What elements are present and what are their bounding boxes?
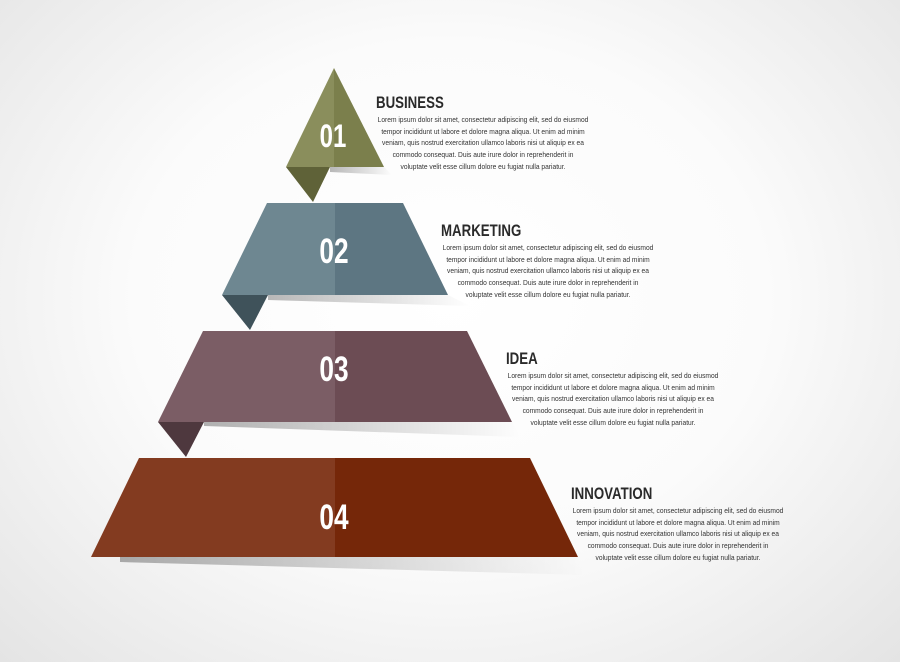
level 2: 02 bbox=[319, 231, 349, 271]
level 2 bbox=[222, 203, 470, 330]
level 3: 03 bbox=[319, 349, 349, 389]
text block: idea: Lorem ipsum dolor sit amet, consectetur adipiscing elit, sed do eiusmod bbox=[508, 371, 718, 380]
text block: business bbox=[376, 93, 588, 171]
text block: business: tempor incididunt ut labore et dolore magna aliqua. Ut enim ad minim bbox=[381, 127, 585, 136]
text block: business: commodo consequat. Duis aute irure dolor in reprehenderit in bbox=[393, 150, 573, 159]
level 4: 04 bbox=[319, 497, 349, 537]
text block: innovation: commodo consequat. Duis aute irure dolor in reprehenderit in bbox=[588, 541, 768, 550]
text block: idea: veniam, quis nostrud exercitation ullamco laboris nisi ut aliquip ex ea bbox=[512, 394, 714, 403]
level 1: triangle: 01 bbox=[320, 118, 346, 154]
text block: idea: commodo consequat. Duis aute irure dolor in reprehenderit in bbox=[523, 406, 703, 415]
text block: idea bbox=[506, 349, 718, 427]
text block: innovation: INNOVATION bbox=[571, 484, 652, 503]
level 3 bbox=[158, 331, 520, 457]
text block: innovation bbox=[571, 484, 783, 562]
text block: idea: voluptate velit esse cillum dolore eu fugiat nulla pariatur. bbox=[531, 418, 695, 427]
text block: business: BUSINESS bbox=[376, 93, 444, 112]
text block: marketing: MARKETING bbox=[441, 221, 521, 240]
level 4 bbox=[91, 458, 585, 575]
text block: marketing bbox=[441, 221, 653, 299]
text block: marketing: Lorem ipsum dolor sit amet, consectetur adipiscing elit, sed do eiusmod bbox=[443, 243, 653, 252]
level 1: triangle bbox=[286, 68, 392, 202]
text block: innovation: voluptate velit esse cillum dolore eu fugiat nulla pariatur. bbox=[596, 553, 760, 562]
text block: marketing: commodo consequat. Duis aute irure dolor in reprehenderit in bbox=[458, 278, 638, 287]
text block: business: voluptate velit esse cillum dolore eu fugiat nulla pariatur. bbox=[401, 162, 565, 171]
text block: idea: tempor incididunt ut labore et dolore magna aliqua. Ut enim ad minim bbox=[511, 383, 715, 392]
text block: innovation: Lorem ipsum dolor sit amet, consectetur adipiscing elit, sed do eiusmod bbox=[573, 506, 783, 515]
text block: innovation: veniam, quis nostrud exercitation ullamco laboris nisi ut aliquip ex ea bbox=[577, 529, 779, 538]
text block: innovation: tempor incididunt ut labore et dolore magna aliqua. Ut enim ad minim bbox=[576, 518, 780, 527]
text block: marketing: veniam, quis nostrud exercitation ullamco laboris nisi ut aliquip ex ea bbox=[447, 266, 649, 275]
text block: business: veniam, quis nostrud exercitation ullamco laboris nisi ut aliquip ex ea bbox=[382, 138, 584, 147]
text block: business: Lorem ipsum dolor sit amet, consectetur adipiscing elit, sed do eiusmod bbox=[378, 115, 588, 124]
text block: marketing: tempor incididunt ut labore et dolore magna aliqua. Ut enim ad minim bbox=[446, 255, 650, 264]
text block: idea: IDEA bbox=[506, 349, 538, 368]
text block: marketing: voluptate velit esse cillum dolore eu fugiat nulla pariatur. bbox=[466, 290, 630, 299]
